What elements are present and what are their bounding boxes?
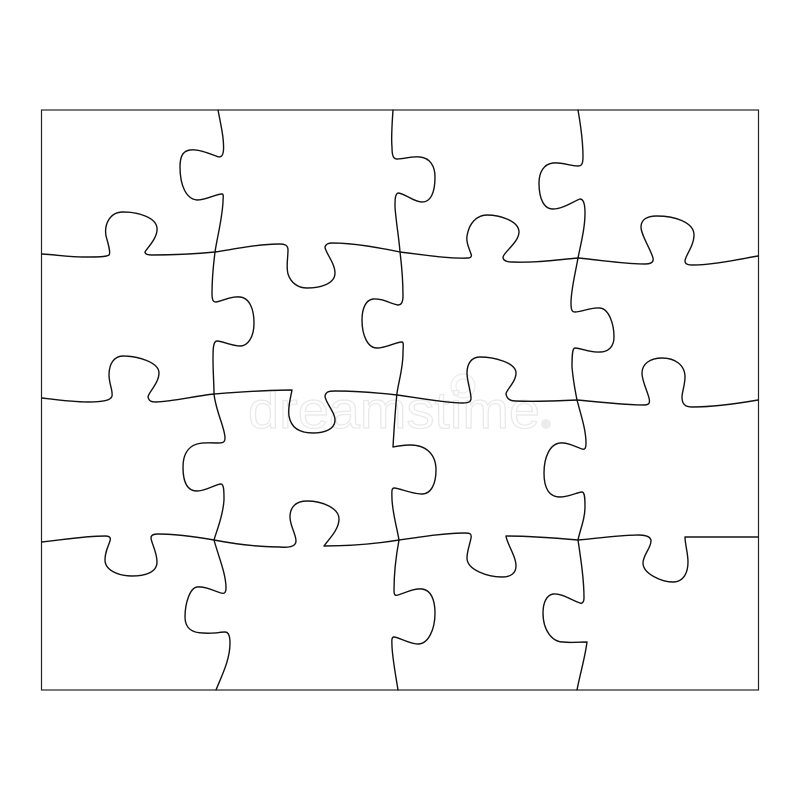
vertical seam 3 — [539, 110, 614, 690]
horizontal seam 2 — [42, 356, 758, 433]
horizontal seam 1 — [42, 212, 758, 288]
vertical seam 2 — [362, 110, 436, 690]
vertical seam 1 — [180, 110, 254, 690]
puzzle cut lines — [42, 110, 758, 690]
watermark: dreamstime — [248, 382, 540, 440]
horizontal seam 3 — [42, 501, 758, 582]
puzzle frame — [42, 110, 758, 690]
